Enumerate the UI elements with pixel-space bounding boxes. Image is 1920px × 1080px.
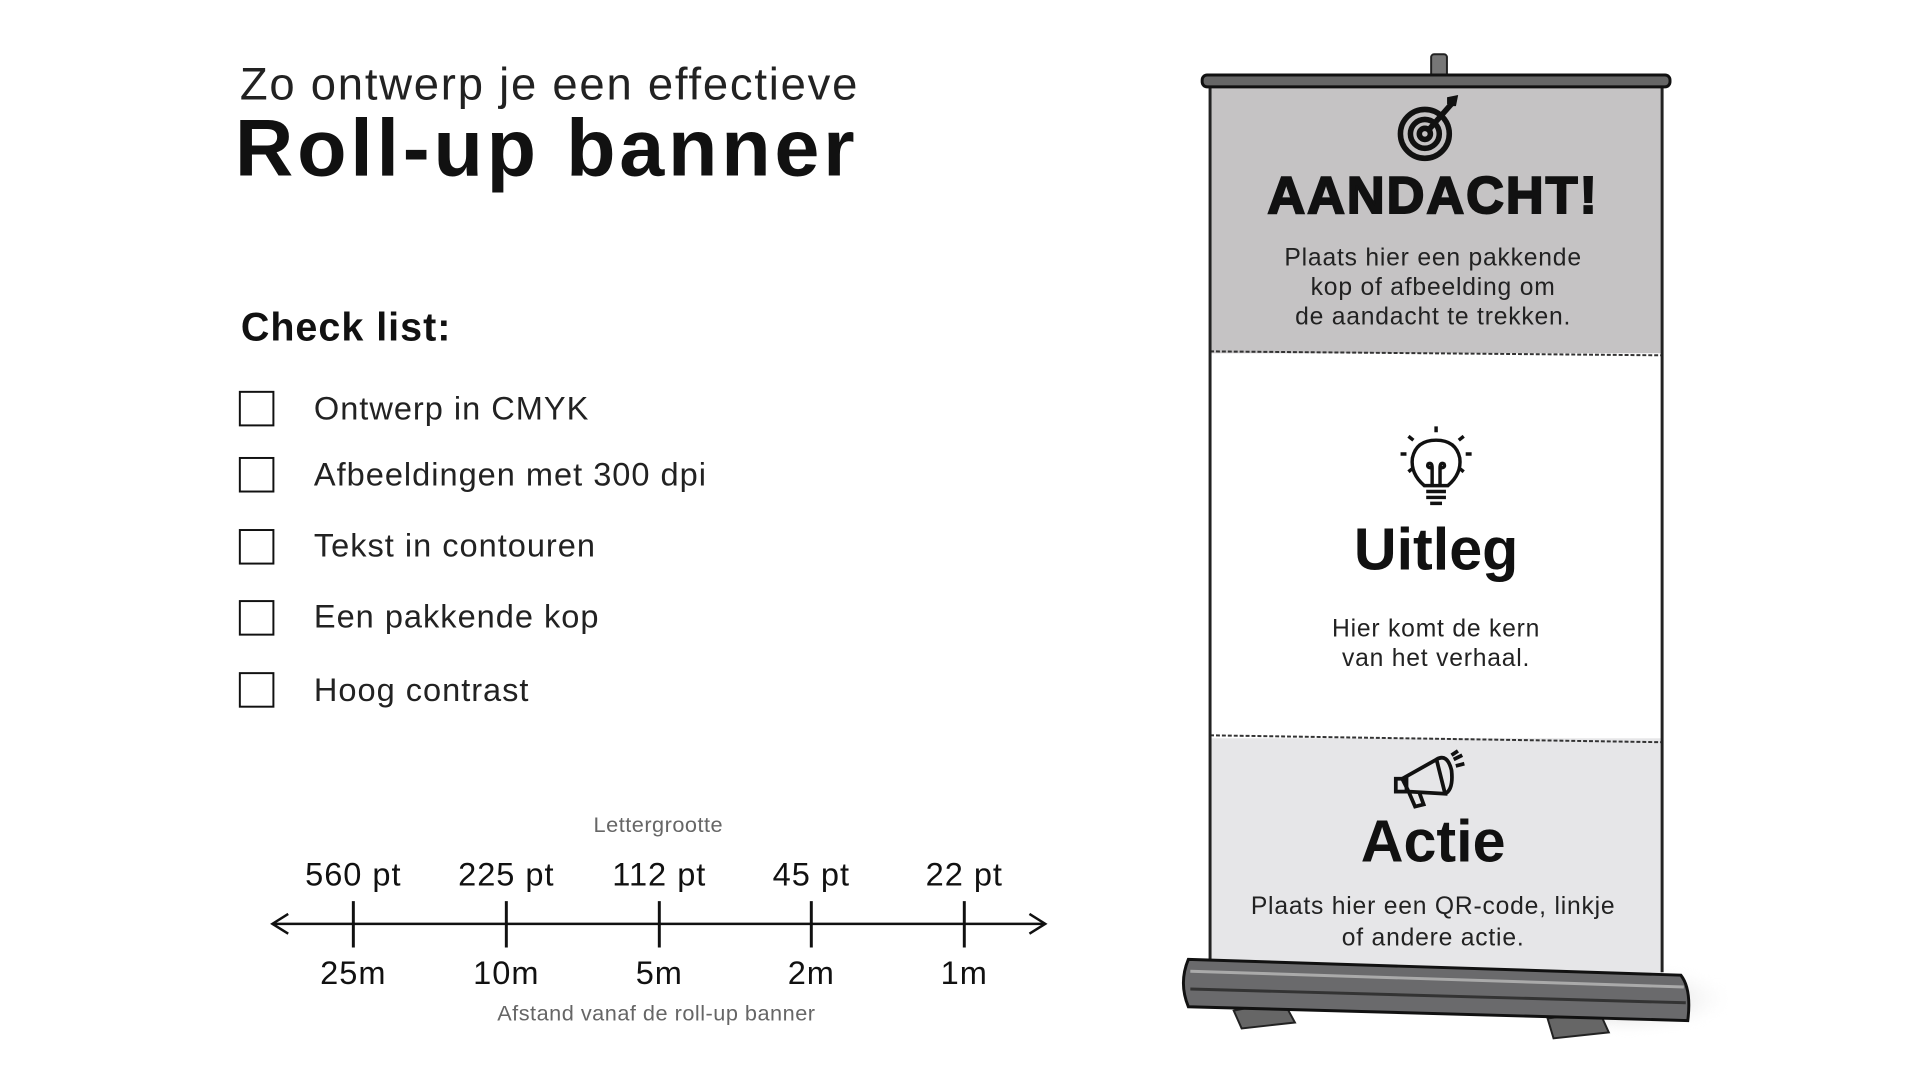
distance scale chart: 10m [473,955,539,991]
heading: Actie: Actie [1361,808,1506,874]
checklist: Hoog contrast [314,671,529,708]
text: actie: of andere actie. [1342,924,1524,951]
distance scale chart: 2m [788,955,835,991]
heading: AANDACHT: AANDACHT! [1267,167,1599,225]
checklist: Tekst in contouren [314,527,596,564]
text: aandacht [1284,244,1582,331]
text: uitleg: van het verhaal. [1342,645,1530,672]
title: Roll-up banner [235,104,858,193]
checklist: Afbeeldingen met 300 dpi [314,456,707,493]
distance scale chart [270,856,1048,991]
checklist: Een pakkende kop [314,598,599,635]
scale label bottom: Afstand vanaf de roll-up banner [497,1001,816,1025]
item 1 [238,390,589,426]
text: aandacht: kop of afbeelding om [1311,273,1556,301]
text: uitleg [1332,615,1540,672]
item 5 [238,671,529,708]
text: actie [1251,892,1615,951]
heading: Uitleg: Uitleg [1354,516,1518,582]
icon: target [1398,95,1458,162]
text: uitleg: Hier komt de kern [1332,615,1540,643]
text: actie: Plaats hier een QR-code, linkje [1251,892,1615,920]
distance scale chart: 1m [941,955,988,991]
checklist: Ontwerp in CMYK [314,390,589,426]
subtitle: Zo ontwerp je een effectieve [240,58,859,110]
scale label top: Lettergrootte [594,812,723,837]
distance scale chart: 5m [636,955,683,991]
distance scale chart: 45 pt [773,856,850,892]
icon: megaphone [1394,749,1465,809]
roll-up banner [1182,53,1700,1040]
item 4 [238,598,599,636]
distance scale chart: 112 pt [612,856,706,892]
distance scale chart: 225 pt [458,856,555,892]
item 3 [238,527,596,565]
distance scale chart: 22 pt [926,856,1003,892]
checklist heading: Check list: [241,306,451,349]
text: aandacht: Plaats hier een pakkende [1284,244,1582,271]
checklist [238,390,707,708]
distance scale chart: 25m [320,955,387,991]
icon: lightbulb [1400,426,1472,506]
distance scale chart: 560 pt [305,856,402,892]
item 2 [238,456,707,493]
text: aandacht: de aandacht te trekken. [1295,303,1571,331]
